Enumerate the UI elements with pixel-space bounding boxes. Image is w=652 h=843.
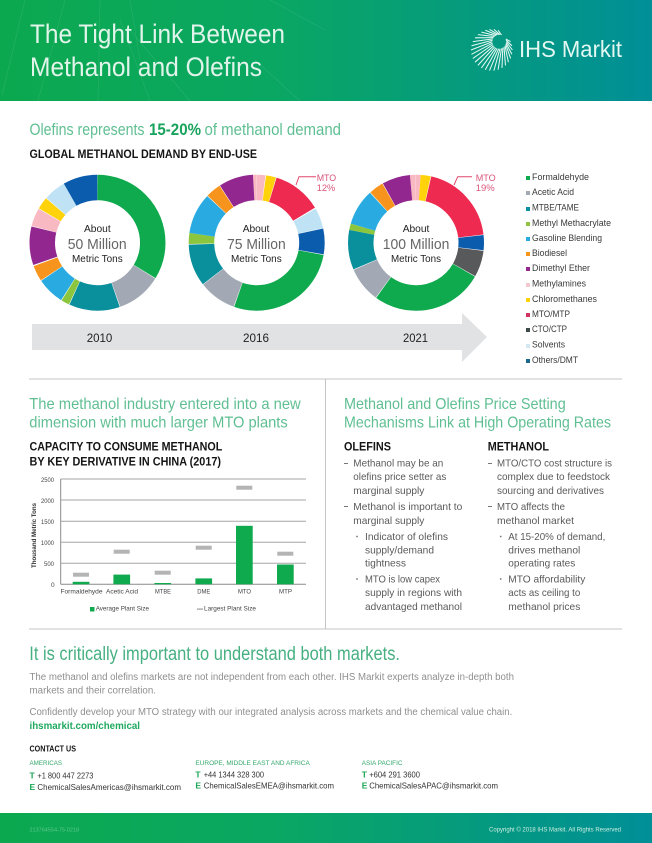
closing text: ihsmarkit.com/chemical <box>30 721 140 732</box>
callout: MTO 19% <box>454 173 496 194</box>
contact: EMEA: T <box>195 770 201 780</box>
column: methanol: methanol prices <box>508 601 580 613</box>
contact: Asia Pacific: ChemicalSalesAPAC@ihsmarkit.com <box>369 780 498 790</box>
logo: IHS Markit <box>471 29 623 71</box>
chart heading: global methanol demand: GLOBAL METHANOL DEMAND BY END-USE <box>30 149 257 161</box>
legend: end uses: CTO/CTP <box>532 324 567 334</box>
chart legend: Average Plant Size <box>96 606 149 613</box>
panel heading: Mechanisms Link at High Operating Rates <box>344 415 611 432</box>
column: olefins: marginal supply <box>353 515 425 527</box>
callout: MTO 12%: 12% <box>317 183 336 194</box>
legend: end uses: MTBE/TAME <box>532 202 579 212</box>
column: olefins: supply/demand <box>365 544 434 556</box>
bar chart: plant capacity: MTO <box>238 589 251 596</box>
chart legend: Largest Plant Size <box>204 606 256 613</box>
donut chart: 2010: Metric Tons <box>72 253 123 265</box>
column: olefins: Methanol is important to <box>353 501 462 513</box>
section heading: olefins share: 15-20% <box>149 120 201 139</box>
contact: EMEA: ChemicalSalesEMEA@ihsmarkit.com <box>204 780 334 790</box>
legend: end uses: Solvents <box>532 340 565 350</box>
legend: end uses: Chloromethanes <box>532 294 597 304</box>
bar chart: plant capacity: 1000 <box>41 540 54 547</box>
column: olefins: Methanol may be an <box>353 458 443 470</box>
column: olefins: advantaged methanol <box>365 601 462 613</box>
contact: Americas: +1 800 447 2273 <box>37 771 94 781</box>
bar chart: plant capacity: MTP <box>279 589 292 596</box>
logo: IHS Markit: IHS Markit <box>519 36 623 62</box>
column: methanol: MTO affordability <box>508 574 586 586</box>
contact: Asia Pacific <box>362 760 498 790</box>
legend: end uses: Acetic Acid <box>532 187 574 197</box>
bar chart: plant capacity: Thousand Metric Tons <box>32 502 38 568</box>
donut chart: 2021: Metric Tons <box>391 253 441 265</box>
column: methanol: drives methanol <box>508 544 580 556</box>
column: methanol: METHANOL <box>488 440 549 454</box>
legend: end uses <box>526 172 611 365</box>
column: methanol: MTO/CTO cost structure is <box>497 458 612 470</box>
contact: Americas <box>30 760 181 792</box>
closing text: Confidently develop your MTO strategy with our integrated analysis across markets and the chemical value chain. <box>30 707 512 718</box>
section heading: olefins share: of methanol demand <box>204 120 341 139</box>
timeline arrow: 2021 <box>403 331 428 345</box>
column: methanol: acts as ceiling to <box>508 587 580 599</box>
timeline arrow: 2010 <box>87 331 113 345</box>
donut chart: 2021: 100 Million <box>383 236 449 253</box>
bar chart: plant capacity: Formaldehyde <box>60 589 103 596</box>
title: Methanol and Olefins <box>30 52 262 82</box>
contact: Asia Pacific: E <box>362 780 368 790</box>
column: olefins: supply in regions with <box>365 587 462 599</box>
footer band <box>0 813 652 843</box>
closing heading: It is critically important to understand both markets. <box>29 644 400 665</box>
legend: end uses: Methyl Methacrylate <box>532 218 611 228</box>
contact: EMEA: E <box>195 780 201 790</box>
section heading: olefins share: Olefins represents <box>30 120 144 139</box>
contact: EMEA: +44 1344 328 300 <box>204 770 264 780</box>
bar chart: plant capacity <box>32 477 306 613</box>
column: olefins: OLEFINS <box>344 440 391 454</box>
column: olefins: olefins price setter as <box>353 471 446 483</box>
header banner <box>0 0 652 101</box>
panel heading <box>29 396 301 432</box>
chart heading: BY KEY DERIVATIVE IN CHINA (2017) <box>30 457 221 469</box>
legend: end uses: Formaldehyde <box>532 172 589 182</box>
bar chart: plant capacity: Acetic Acid <box>106 589 138 596</box>
contact: Asia Pacific: ASIA PACIFIC <box>362 760 403 767</box>
bar chart: plant capacity: 0 <box>51 582 55 589</box>
legend: end uses: Methylamines <box>532 278 586 288</box>
bar chart: plant capacity: 500 <box>44 561 54 568</box>
donut chart: 2021 <box>361 187 471 298</box>
column: olefins: MTO is low capex <box>365 574 441 586</box>
column: olefins: tightness <box>365 558 406 570</box>
column: olefins: Indicator of olefins <box>365 531 448 543</box>
donut chart: 2021: About <box>403 223 429 235</box>
contact: Americas: AMERICAS <box>30 760 63 767</box>
bar chart: plant capacity: DME <box>197 589 211 596</box>
donut chart: 2016: Metric Tons <box>231 253 282 265</box>
legend: end uses: Gasoline Blending <box>532 233 602 243</box>
column: methanol: operating rates <box>508 558 575 570</box>
legend: end uses: Others/DMT <box>532 355 578 365</box>
column: olefins <box>344 440 462 613</box>
timeline arrow: 2016 <box>243 331 269 345</box>
column: methanol: complex due to feedstock <box>497 471 611 483</box>
legend: end uses: Biodiesel <box>532 248 567 258</box>
donut chart: 2010: 50 Million <box>68 236 127 253</box>
bar chart: plant capacity: MTBE <box>155 589 172 596</box>
footer band: 213764554-75-0218 <box>30 828 79 834</box>
donut chart: 2010 <box>42 187 153 298</box>
chart legend <box>90 606 256 613</box>
donut chart: 2016 <box>201 187 312 298</box>
panel heading: Methanol and Olefins Price Setting <box>344 396 566 413</box>
contact: EMEA <box>195 760 334 790</box>
callout: MTO 12%: MTO <box>317 173 336 184</box>
column: methanol <box>488 440 612 613</box>
title: The Tight Link Between <box>30 19 285 49</box>
contact: Americas: ChemicalSalesAmericas@ihsmarkit.com <box>37 782 181 792</box>
section heading: olefins share <box>30 120 341 139</box>
chart heading: CAPACITY TO CONSUME METHANOL <box>30 442 222 454</box>
chart heading <box>30 442 222 469</box>
timeline arrow <box>32 313 487 362</box>
column: methanol: At 15-20% of demand, <box>508 531 605 543</box>
panel heading: dimension with much larger MTO plants <box>29 415 288 432</box>
contact: Americas: E <box>30 782 36 792</box>
callout: MTO 19%: 19% <box>476 183 495 194</box>
donut chart: 2016: About <box>243 223 269 235</box>
legend: end uses: MTO/MTP <box>532 309 570 319</box>
closing text <box>30 672 514 732</box>
closing text: The methanol and olefins markets are not independent from each other. IHS Markit experts analyze in-depth both <box>30 672 514 683</box>
contact: Americas: T <box>30 771 36 781</box>
column: methanol: methanol market <box>497 515 574 527</box>
contact: EMEA: EUROPE, MIDDLE EAST AND AFRICA <box>195 760 310 767</box>
column: methanol: MTO affects the <box>497 501 565 513</box>
contact section <box>30 744 498 792</box>
bar chart: plant capacity: 2000 <box>41 498 54 505</box>
bar chart: plant capacity: 1500 <box>41 519 54 526</box>
contact: Asia Pacific: +604 291 3600 <box>369 770 420 780</box>
title <box>30 19 285 82</box>
footer band: Copyright © 2018 IHS Markit. All Rights Reserved <box>489 827 621 834</box>
callout: MTO 12% <box>296 173 336 194</box>
donut chart: 2010: About <box>84 223 111 235</box>
contact section: CONTACT US <box>30 744 76 754</box>
donut chart: 2016: 75 Million <box>227 236 286 253</box>
bar chart: plant capacity: 2500 <box>41 477 54 484</box>
column: methanol: sourcing and derivatives <box>497 485 604 497</box>
panel: MTO plants <box>29 396 306 613</box>
panel: price setting mechanisms <box>344 396 612 613</box>
panel heading: The methanol industry entered into a new <box>29 396 301 413</box>
contact: Asia Pacific: T <box>362 770 368 780</box>
callout: MTO 19%: MTO <box>476 173 496 184</box>
panel heading <box>344 396 611 432</box>
column: olefins: marginal supply <box>353 485 425 497</box>
legend: end uses: Dimethyl Ether <box>532 263 590 273</box>
closing text: markets and their correlation. <box>30 685 156 696</box>
